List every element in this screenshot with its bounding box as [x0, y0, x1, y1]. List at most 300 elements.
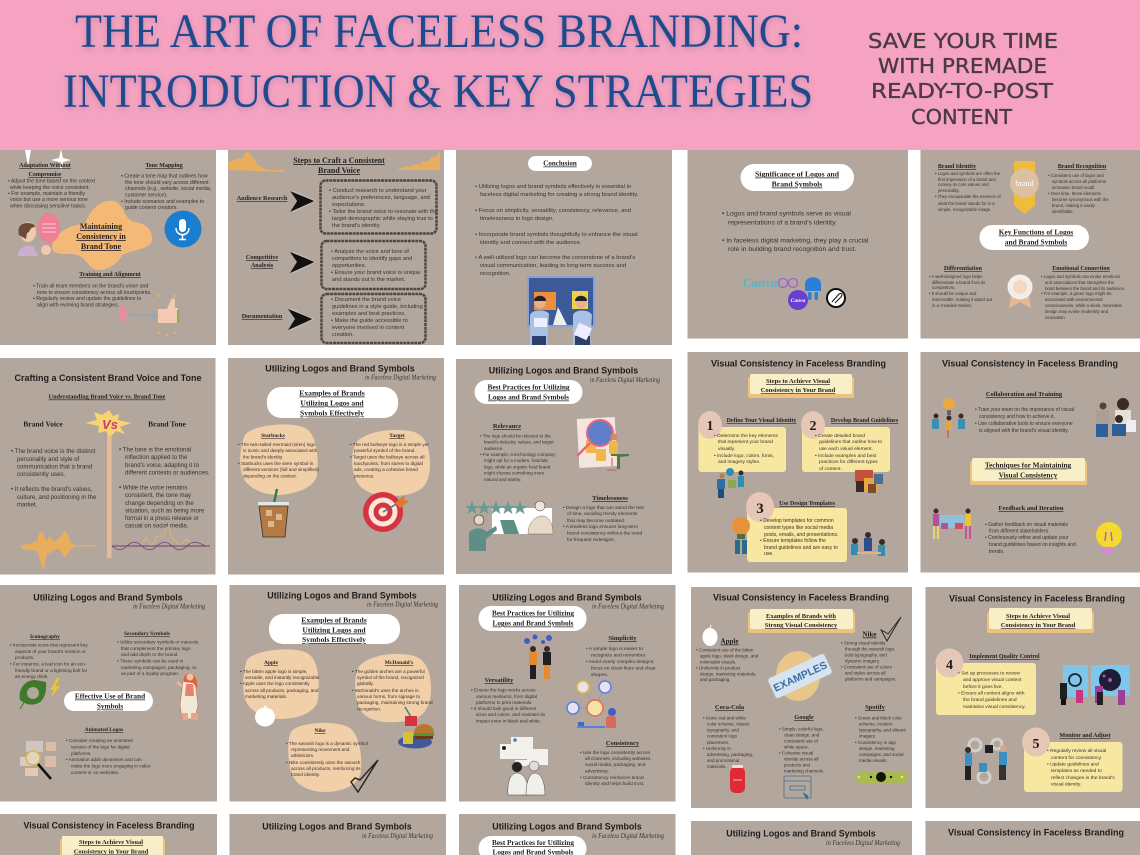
step 3: brand guidelines and are easy to — [764, 545, 838, 551]
heading pill — [478, 606, 586, 631]
row: audience research: audience's preferences, language, and — [332, 195, 430, 201]
text: nike bullets: • Consistent use of colors — [841, 664, 893, 670]
text: training bullets: tone to ensure consistency across all touchpoints. — [37, 290, 151, 296]
text: timelessness bullets — [563, 505, 645, 543]
text: conclusion bullets: • A well-utilized logo can become the cornerstone of a brand's — [475, 255, 635, 261]
icon: coke can — [730, 765, 745, 793]
text: apple bullets: minimalist visuals. — [700, 660, 736, 664]
text: mcdonalds bullets: • The golden arches are a powerful — [352, 669, 425, 674]
step 1: 1 — [706, 419, 714, 434]
text: apple bullets: • The bitten apple logo is simple, — [240, 669, 307, 674]
text: relevance bullets: might choose something more — [484, 470, 545, 476]
step 4: and approve visual content — [963, 677, 1022, 683]
heading: coca-cola: Coca-Cola — [715, 704, 745, 711]
text: apple bullets: across all products, packaging, and — [245, 688, 319, 693]
heading: adaptation: Adaptation Without — [19, 163, 71, 169]
text: brand voice bullets: personality and style of — [17, 456, 80, 463]
step 1: visually. — [718, 446, 735, 452]
text: animated bullets: make the logo more engaging in video — [71, 764, 151, 768]
text: brand recognition bullets: identifiable. — [1052, 209, 1074, 214]
title: Utilizing Logos and Brand Symbols — [33, 592, 183, 602]
banner — [748, 609, 855, 633]
heading: differentiation: Differentiation — [944, 266, 983, 272]
heading: feedback: Feedback and Iteration — [998, 505, 1064, 512]
title — [63, 5, 813, 118]
panel: partial row utilizing logos — [230, 814, 446, 855]
heading: tone mapping: Tone Mapping — [145, 163, 183, 169]
title: Utilizing Logos and Brand Symbols — [492, 592, 642, 602]
step 2: guidelines that outline how to — [819, 439, 882, 445]
text: adaptation bullets: • For example, maintain a friendly — [8, 191, 85, 197]
text: apple bullets — [696, 648, 759, 682]
tagline: READY-TO-POST — [871, 79, 1054, 103]
text: timelessness bullets: that may become outdated. — [567, 518, 625, 524]
panel: partial row visual consistency right — [926, 821, 1140, 855]
text: relevance bullets: • For example, a technology company — [480, 452, 556, 457]
text: collaboration bullets — [975, 407, 1074, 434]
heading pill: Symbols Effectively — [300, 408, 364, 418]
row: documentation: • Document the brand voice — [331, 297, 401, 303]
heading: iconography: Iconography — [30, 634, 60, 640]
step 1 — [698, 411, 796, 472]
text: timelessness bullets: • A timeless logo ensures long-term — [563, 524, 638, 530]
icon: speaking man — [18, 213, 60, 256]
text: differentiation bullets: in a crowded market. — [932, 303, 972, 308]
heading: apple: Apple — [721, 638, 738, 646]
row: documentation — [242, 294, 426, 343]
text: target bullets: powerful symbol of the brand. — [354, 448, 416, 453]
text: significance bullets — [722, 210, 869, 253]
text: nike bullets: • Nike consistently uses the swoosh — [286, 760, 361, 765]
text: relevance bullets: logo, while an organic food brand — [484, 464, 551, 470]
text: spotify bullets: • Green and black color — [855, 716, 902, 720]
heading pill: key functions: and Brand Symbols — [1005, 238, 1067, 246]
row: documentation: guidelines in a style guide, including — [332, 304, 423, 310]
banner — [748, 374, 854, 398]
step 3 — [746, 492, 847, 562]
panel: best practices simplicity versatility consistency — [459, 585, 676, 802]
tagline — [868, 29, 1058, 129]
heading pill: Best Practices for Utilizing — [488, 384, 570, 392]
text: nike bullets: across all products, reinforcing its — [291, 766, 361, 771]
badge: examples: EXAMPLES — [772, 659, 829, 695]
heading: simplicity: Simplicity — [608, 635, 637, 642]
heading pill: effective use: Effective Use of Brand — [75, 692, 145, 700]
text: conclusion bullets: • Utilizing logos and brand symbols effectively is essential in — [475, 184, 631, 190]
illustration: three colleagues — [1096, 398, 1136, 437]
script subtitle: in Faceless Digital Marketing — [592, 602, 664, 610]
text: secondary bullets: as part of a loyalty program. — [121, 671, 179, 676]
row: audience research: • Conduct research to understand your — [329, 188, 427, 194]
text: versatility bullets: • It should look good in different — [471, 706, 537, 711]
text: coca-cola bullets: and promotional — [707, 758, 739, 763]
title: Visual Consistency in Faceless Branding — [948, 828, 1124, 838]
text: simplicity bullets: recognize and remember. — [591, 652, 646, 658]
heading: spotify: Spotify — [865, 704, 886, 711]
text: nike bullets: brand identity. — [291, 772, 320, 777]
text: versatility bullets — [471, 688, 546, 724]
text: brand tone bullets: inflection applied to the — [125, 454, 188, 461]
text: apple bullets: marketing materials. — [245, 694, 287, 699]
text: nike bullets: through the swoosh logo, — [845, 646, 895, 652]
text: brand tone bullets: consistent, the tone may — [125, 492, 192, 499]
text: nike bullets: bold typography, and — [845, 652, 887, 658]
text: brand tone bullets — [119, 446, 210, 530]
heading: timelessness: Timelessness — [592, 495, 628, 502]
illustration: analysts with boards — [1060, 665, 1130, 705]
tagline: CONTENT — [911, 105, 1013, 129]
text: consistency bullets: • Consistency reinforces brand — [580, 775, 644, 780]
row: audience research: Audience Research — [237, 195, 288, 202]
step 3: • Develop templates for common — [760, 518, 834, 524]
text: google bullets: white space. — [784, 744, 809, 750]
text: training bullets: • Train all team members on the brand's voice and — [33, 284, 148, 290]
text: brand recognition bullets: • Over time, these elements — [1048, 191, 1101, 196]
text: mcdonalds bullets: globally. — [357, 681, 374, 686]
step 2: • Create detailed brand — [815, 433, 865, 439]
text: versatility bullets: platforms to print materials. — [476, 700, 533, 705]
script subtitle: in Faceless Digital Marketing — [826, 838, 900, 847]
title: THE ART OF FACELESS BRANDING: — [75, 5, 803, 58]
text: nike bullets — [286, 741, 368, 777]
banner: Steps to Achieve Visual — [766, 378, 830, 385]
text: secondary bullets — [117, 640, 199, 676]
title: Visual Consistency in Faceless Branding — [713, 592, 889, 602]
step 2: 2 — [810, 419, 816, 434]
text: animated bullets: version of the logo for digital — [71, 744, 130, 750]
text: differentiation bullets: competitors. — [932, 285, 955, 290]
text: conclusion bullets: timelessness in logo design. — [480, 216, 554, 222]
heading pill: key functions — [980, 225, 1089, 250]
title: Crafting a Consistent Brand Voice and Tone — [14, 373, 202, 383]
banner: Consistency in Your Brand — [1001, 622, 1076, 629]
step 4: 4 — [946, 658, 953, 673]
decorative sound bars — [228, 151, 440, 172]
text: brand tone bullets: situation, such as being more — [125, 508, 205, 514]
label: brand tone: Brand Tone — [148, 420, 187, 428]
text: brand tone bullets: • The tone is the emotional — [119, 446, 191, 454]
text: apple bullets: versatile, and instantly recognizable. — [245, 675, 321, 680]
script subtitle: in Faceless Digital Marketing — [362, 831, 433, 840]
heading: starbucks: Starbucks — [261, 433, 285, 439]
icon: brand ribbon badge: brand — [1015, 179, 1034, 188]
text: coca-cola bullets: consistent logo — [707, 734, 738, 738]
text: differentiation bullets: • It should be unique and — [929, 291, 977, 296]
text: target bullets: ads, creating a cohesive brand — [354, 467, 418, 472]
text: brand identity bullets: convey its core values and — [938, 182, 989, 187]
panel: effective use of brand symbols — [0, 585, 217, 802]
heading pill: Best Practices for Utilizing — [492, 839, 574, 847]
banner: techniques — [970, 458, 1087, 485]
text: starbucks bullets: is iconic and deeply associated with — [243, 448, 318, 453]
text: training bullets: • Regularly review and update the guidelines to — [33, 296, 141, 302]
heading: apple: Apple — [264, 660, 279, 666]
panel: key functions of logos — [920, 150, 1140, 338]
text: brand recognition bullets: brand, making it easily — [1052, 203, 1096, 208]
text: adaptation bullets: while keeping the voice consistent. — [10, 185, 90, 191]
icon: iced coffee — [258, 489, 289, 537]
text: brand recognition bullets: symbols across all platforms — [1052, 179, 1106, 184]
text: consistency bullets — [580, 750, 652, 786]
text: timelessness bullets: • Design a logo that can stand the test — [563, 505, 645, 511]
text: versatility bullets: various mediums, from digital — [476, 694, 537, 699]
text: nike bullets: dynamic imagery. — [845, 658, 880, 664]
text: brand identity bullets — [935, 171, 1001, 212]
heading pill: Brand Symbols — [772, 180, 822, 188]
panel: conclusion — [456, 150, 672, 345]
text: tone mapping bullets: • Create a tone map that outlines how — [121, 174, 208, 180]
label: brand voice: Brand Voice — [23, 420, 63, 428]
heading: Brand Voice — [318, 166, 360, 175]
text: target bullets — [350, 442, 429, 478]
illustration: two sketched people — [508, 761, 545, 795]
logos: canva android link: Canva — [791, 298, 806, 304]
title: Utilizing Logos and Brand Symbols — [489, 366, 638, 376]
text: emotional connection bullets: and associations that strengthen the — [1045, 280, 1115, 285]
text: iconography bullets: products. — [15, 655, 34, 660]
text: conclusion bullets: identity and connect with the audience. — [480, 240, 582, 246]
banner — [60, 836, 165, 855]
title: Utilizing Logos and Brand Symbols — [262, 822, 412, 832]
text: timelessness bullets: of time, avoiding trendy elements — [567, 511, 638, 517]
panel: examples of brands with strong visual consistency — [691, 587, 912, 808]
text: mcdonalds bullets — [352, 669, 433, 712]
text: animated bullets: platforms. — [71, 751, 92, 756]
orange blob with title: Brand Tone — [81, 242, 122, 251]
text: emotional connection bullets: associated with environmental — [1045, 297, 1103, 302]
row: competitive analysis: • Ensure your brand voice is unique — [331, 270, 421, 276]
row: audience research — [237, 180, 438, 234]
step 5: templates as needed to — [1051, 768, 1102, 774]
script subtitle: in Faceless Digital Marketing — [365, 372, 436, 382]
text: spotify bullets: campaigns, and social — [859, 752, 904, 757]
step 5: 5 — [1032, 737, 1040, 752]
text: coca-cola bullets: • Iconic red and white — [703, 716, 746, 720]
panel: best practices relevance timelessness — [456, 359, 672, 574]
chart: orange voice waveform — [20, 530, 96, 572]
panel: steps 4 and 5 — [926, 587, 1140, 808]
heading pill — [269, 614, 400, 644]
title: Utilizing Logos and Brand Symbols — [726, 828, 876, 838]
panel: visual consistency steps 1 to 3 — [688, 352, 908, 572]
icon: sparkles — [25, 149, 71, 171]
step 4: the brand guidelines and — [963, 697, 1017, 703]
step 4: before it goes live. — [963, 684, 1003, 690]
illustration: yellow bulb — [1089, 522, 1122, 553]
text: brand identity bullets: personality. — [938, 188, 960, 193]
text: tone mapping bullets: channels (e.g., website, social media, — [125, 186, 211, 192]
icon: check mark — [351, 760, 378, 792]
text: brand tone bullets: formal in a press release or — [125, 515, 199, 522]
text: timelessness bullets: brand consistency without the need — [567, 530, 643, 536]
text: consistency bullets: • Use the logo consistently across — [580, 750, 651, 755]
heading pill — [267, 387, 398, 418]
panel: examples starbucks target — [228, 358, 444, 574]
text: brand tone bullets: different contexts or audiences. — [125, 470, 210, 476]
text: brand tone bullets: brand's voice, adapting it to — [125, 462, 200, 469]
heading: versatility: Versatility — [485, 677, 514, 684]
text: nike bullets: • The swoosh logo is a dynamic symbol — [286, 741, 368, 746]
text: adaptation bullets: voice but use a more serious tone — [10, 197, 88, 203]
text: brand recognition bullets: • Consistent use of logos and — [1048, 173, 1104, 178]
step 3: 3 — [756, 501, 764, 517]
heading pill: Significance of Logos and — [755, 170, 840, 178]
heading: consistency: Consistency — [606, 740, 640, 747]
text: brand voice bullets — [11, 448, 97, 508]
step 4: • Ensure all content aligns with — [958, 690, 1025, 696]
text: brand identity bullets: simple, recognizable image. — [938, 207, 991, 212]
text: starbucks bullets: different versions (full and simplified) — [243, 467, 319, 472]
illustration: two men at strategy board — [528, 277, 594, 345]
orange blob with title: Maintaining — [80, 222, 122, 231]
text: conclusion bullets: faceless digital marketing for creating a strong brand identity. — [480, 192, 639, 198]
text: google bullets: • Simple, colorful logo, — [779, 726, 824, 732]
illustration: two people and icons — [524, 634, 552, 679]
icon: award rosette — [1008, 274, 1032, 308]
text: coca-cola bullets: placement. — [707, 740, 729, 745]
icon: apple — [702, 625, 718, 646]
text: relevance bullets: might opt for a modern, futuristic — [484, 458, 549, 463]
text: simplicity bullets: focus on clean lines and clear — [591, 666, 656, 672]
panel: significance of logos — [688, 150, 908, 338]
text: consistency bullets: identity and helps build trust. — [585, 781, 644, 786]
panel: collaboration and feedback — [920, 352, 1140, 572]
banner: Steps to Achieve Visual — [79, 839, 143, 846]
icon: burger and fries — [398, 707, 434, 748]
script subtitle: in Faceless Digital Marketing — [590, 375, 660, 384]
heading: training and alignment: Training and Alignment — [79, 272, 141, 278]
panel: examples apple mcdonalds nike — [230, 585, 446, 802]
illustration: people with gears — [965, 739, 1007, 783]
text: starbucks bullets: the brand's identity. — [243, 454, 283, 460]
icon: magnifier over documents — [20, 741, 56, 779]
text: mcdonalds bullets: packaging, maintaining strong brand — [357, 700, 433, 705]
text: differentiation bullets: • A well-designed logo helps — [929, 274, 982, 279]
row: audience research: target demographic while staying true to — [332, 216, 433, 222]
logos: canva android link: Canva — [743, 275, 778, 290]
illustration: team at table — [851, 532, 885, 556]
step 5: Monitor and Adjust — [1060, 733, 1110, 739]
illustration: orange bulb — [732, 517, 750, 554]
row: competitive analysis: opportunities. — [332, 263, 367, 269]
text: google bullets: clean design, and — [784, 732, 820, 738]
banner: techniques: Techniques for Maintaining — [985, 460, 1072, 470]
step 2: practices for different types — [819, 459, 878, 465]
text: starbucks bullets — [238, 442, 319, 478]
text: google bullets: identity across all — [784, 756, 819, 762]
text: emotional connection bullets — [1041, 274, 1125, 320]
text: coca-cola bullets: advertising, packaging, — [707, 752, 753, 757]
heading pill: Examples of Brands — [301, 616, 367, 624]
text: nike bullets: • Strong visual identity — [841, 640, 886, 646]
text: apple bullets: • Apple uses the logo consistently — [240, 681, 310, 686]
text: brand voice bullets: communication that a brand — [17, 464, 92, 470]
text: collaboration bullets: • Use collaborative tools to ensure everyone — [975, 421, 1073, 427]
text: tone mapping bullets: customer service). — [125, 192, 167, 198]
title: Utilizing Logos and Brand Symbols — [492, 822, 642, 832]
title: Utilizing Logos and Brand Symbols — [265, 364, 415, 374]
row: documentation: • Make the guide accessible to — [331, 318, 408, 324]
text: versatility bullets: sizes and colors, and maintain its — [476, 712, 546, 717]
text: simplicity bullets: • Avoid overly complex designs; — [586, 659, 654, 665]
step 4: • Set up processes to review — [958, 670, 1020, 676]
row: competitive analysis: and stands out in the market. — [332, 277, 406, 283]
text: brand recognition bullets — [1048, 173, 1109, 214]
text: animated bullets — [66, 738, 151, 775]
banner — [987, 608, 1094, 633]
text: adaptation bullets: • Adjust the tone based on the context — [8, 178, 96, 184]
step 5 — [1022, 728, 1122, 792]
step 3: content types like social media — [764, 525, 833, 531]
text: brand recognition bullets: increases brand recall. — [1052, 185, 1095, 190]
orange blob with title: Consistency in — [76, 232, 126, 241]
text: differentiation bullets: memorable, making it stand out — [932, 297, 993, 302]
step 3: Use Design Templates — [779, 501, 835, 507]
step 3: use. — [764, 551, 774, 557]
row: documentation: creation. — [332, 332, 354, 338]
panel: maintaining consistency in brand tone — [0, 149, 216, 345]
text: brand identity bullets: what the brand stands for in a — [938, 201, 995, 206]
heading: relevance: Relevance — [493, 423, 521, 430]
text: emotional connection bullets: innovation. — [1045, 315, 1066, 320]
text: emotional connection bullets: • Logos and symbols can evoke emotions — [1041, 274, 1120, 279]
heading: secondary symbols: Secondary Symbols — [124, 631, 170, 637]
text: feedback bullets: brand guidelines based on insights and — [989, 542, 1076, 548]
icon: target with arrow — [363, 492, 409, 532]
banner: techniques: Visual Consistency — [999, 470, 1058, 480]
text: significance bullets: role in building brand recognition and trust. — [728, 246, 857, 253]
text: tone mapping bullets — [121, 174, 211, 211]
text: simplicity bullets: shapes. — [591, 672, 608, 678]
icon: thumbs up with arrow — [120, 295, 180, 336]
illustration: colourful puzzle group — [855, 470, 883, 493]
heading: nike: Nike — [862, 630, 876, 638]
text: coca-cola bullets — [703, 716, 753, 769]
text: consistency bullets: advertising. — [585, 768, 609, 774]
illustration: network with laptop user — [567, 681, 616, 728]
text: consistency bullets: all channels, including websites, — [585, 756, 652, 761]
text: mcdonalds bullets: recognition. — [357, 706, 381, 712]
heading pill: Examples of Brands — [299, 388, 365, 398]
title: Utilizing Logos and Brand Symbols — [267, 590, 417, 600]
text: secondary bullets: • Utilize secondary symbols or mascots — [117, 640, 199, 644]
step 2: use each visual element. — [819, 446, 873, 452]
illustration: magnifier and analyst — [577, 417, 629, 470]
text: consistency bullets: social media, packaging, and — [585, 762, 646, 767]
illustration: feedback board — [933, 508, 971, 539]
heading pill — [474, 380, 582, 404]
step 2: of content. — [819, 466, 842, 472]
text: google bullets — [779, 726, 824, 774]
text: tone mapping bullets: the tone should vary across different — [125, 180, 209, 186]
text: apple bullets: apple logo, sleek design, and — [700, 654, 759, 658]
illustration: team with puzzle — [717, 468, 744, 498]
text: collaboration bullets: consistency and how to achieve it. — [979, 414, 1055, 420]
text: brand voice bullets: consistently uses. — [17, 471, 65, 478]
text: target bullets: touchpoints, from stores to digital — [354, 461, 423, 466]
text: feedback bullets: from different stakeholders. — [989, 528, 1050, 534]
icon: vs starburst — [85, 410, 131, 437]
step 1: Define Your Visual Identity — [727, 418, 796, 424]
heading — [293, 156, 385, 175]
text: iconography bullets: friendly brand or a lightning bolt for — [15, 668, 88, 673]
step 1: and imagery styles. — [718, 459, 760, 465]
heading: collaboration: Collaboration and Training — [986, 391, 1063, 398]
text: mcdonalds bullets: symbol of the brand, recognized — [357, 675, 424, 680]
text: brand tone bullets: casual on social media. — [125, 522, 189, 530]
text: tone mapping bullets: • Include scenarios and examples to — [121, 199, 204, 205]
text: nike bullets: and styles across all — [845, 670, 886, 676]
